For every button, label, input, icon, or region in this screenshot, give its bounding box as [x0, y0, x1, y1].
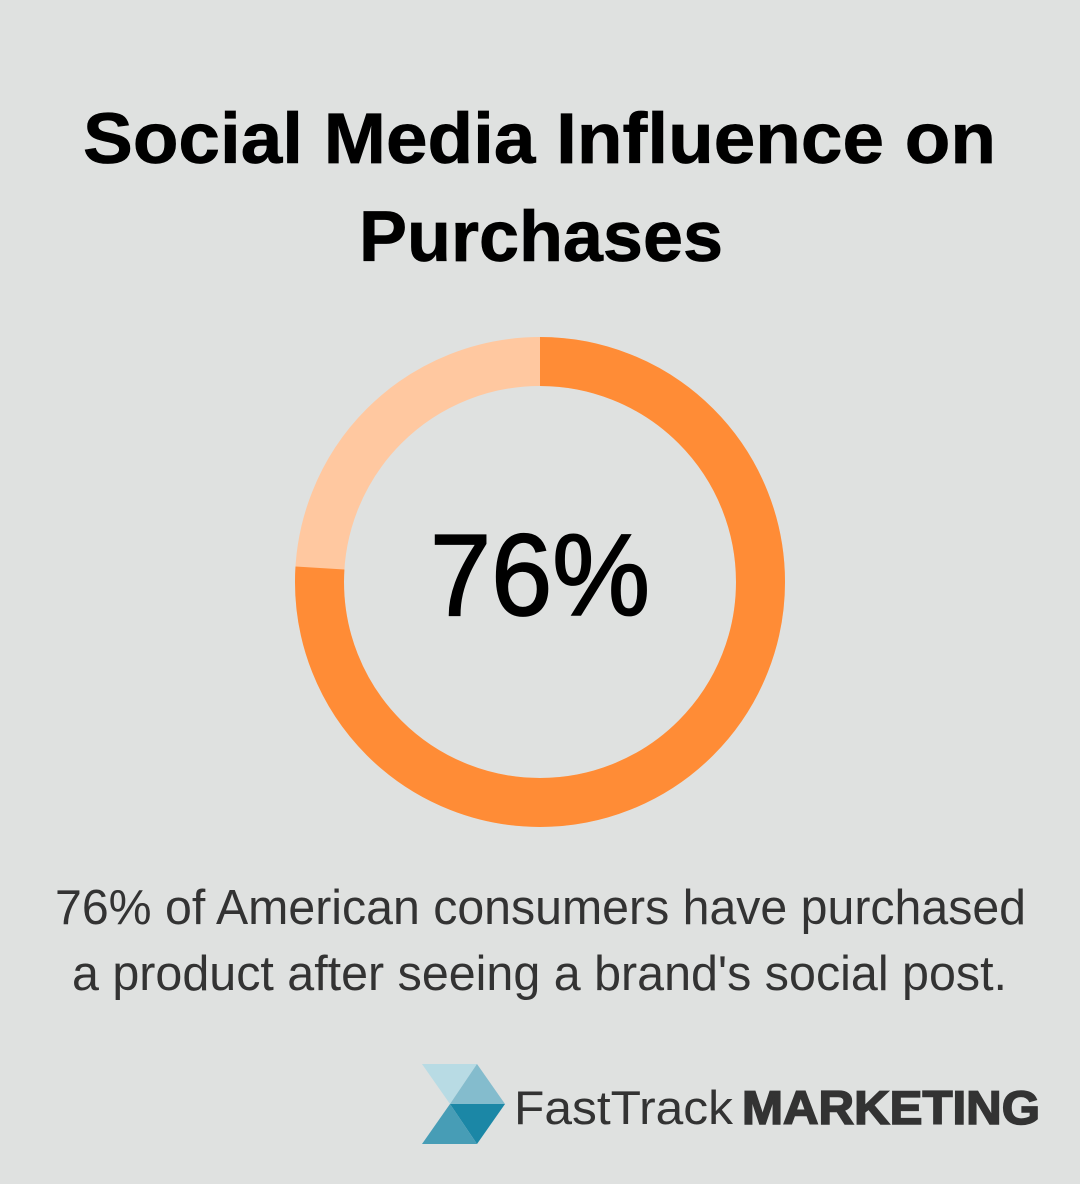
- donut value: 76%: [430, 510, 650, 640]
- description text: [55, 881, 1026, 1001]
- icon: logo triangles: [422, 1064, 505, 1144]
- title: Social Media Influence on: [83, 100, 996, 179]
- description text: 76% of American consumers have purchased: [55, 881, 1026, 935]
- logo wordmark: MARKETING: [742, 1081, 1040, 1134]
- logo wordmark: [514, 1081, 1040, 1134]
- title: [83, 100, 996, 277]
- logo: FastTrack Marketing: [422, 1064, 1040, 1144]
- donut chart: 76%: [320, 362, 760, 802]
- logo wordmark: FastTrack: [514, 1081, 734, 1134]
- description text: a product after seeing a brand's social post.: [72, 947, 1007, 1001]
- title: Purchases: [359, 198, 723, 277]
